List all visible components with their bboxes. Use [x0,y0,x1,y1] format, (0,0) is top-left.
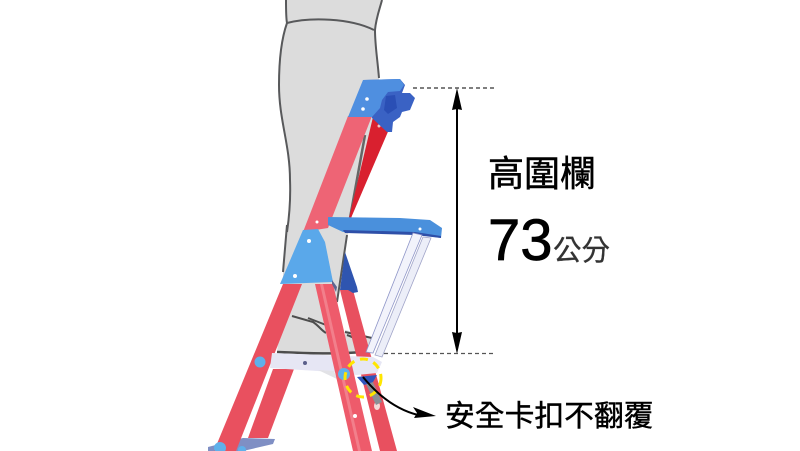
dimension arrow [452,88,462,354]
figure: leg silhouette [277,0,382,353]
yellow dashed circle [345,359,381,397]
support struts: white [366,233,431,357]
label: safety latch: 安全卡扣不翻覆 [445,400,654,433]
ladder: front rails [214,116,372,451]
dashed guide: top [413,87,495,89]
ladder: top cap [348,79,404,117]
ladder: rear bracket top [363,79,415,132]
ladder: rear rails [248,117,397,451]
ladder: rivets [214,220,357,451]
value: 73 cm: 公分 [553,235,610,267]
ladder: middle gusset [280,228,422,292]
bottom step [208,438,275,451]
value: 73 cm [488,208,610,273]
top step: blue platform [328,217,442,238]
heading: high guardrail: 高圍欄 [488,153,596,194]
platform: shadow under step [318,370,337,379]
value: 73 cm: 73 [488,208,553,273]
dashed guide: bottom [384,352,495,354]
platform: white step [270,353,382,375]
safety latch [357,375,382,405]
curved arrow to latch label [363,377,436,418]
ladder: front rail lower [315,284,372,451]
